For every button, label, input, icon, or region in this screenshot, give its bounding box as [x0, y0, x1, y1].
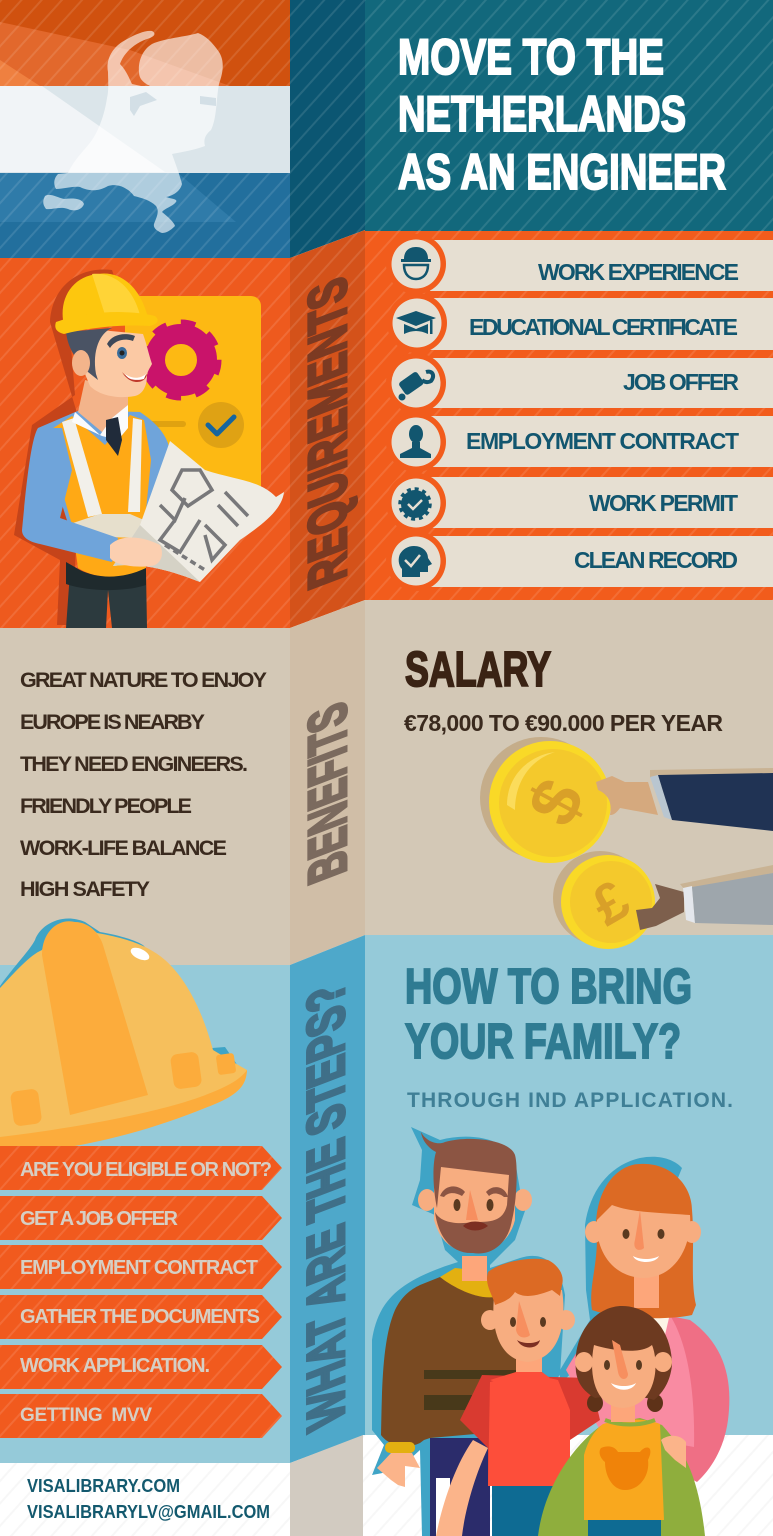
benefits list: FRIENDLY PEOPLE [20, 794, 192, 818]
benefits list: THEY NEED ENGINEERS. [20, 752, 248, 776]
step 4 [0, 1295, 282, 1339]
torso shirt [38, 410, 170, 530]
heading: how to bring your family: HOW TO BRING [405, 960, 692, 1014]
heading: how to bring your family [405, 960, 692, 1069]
illustration: yellow hard hat [0, 918, 247, 1156]
row: work experience [386, 234, 773, 294]
title [398, 29, 726, 200]
boy [436, 1259, 600, 1536]
cuff and hand [385, 1442, 415, 1453]
row: clean record [386, 531, 773, 591]
benefits list: HIGH SAFETY [20, 877, 150, 901]
small coin [553, 851, 655, 949]
step 6 [0, 1394, 282, 1438]
blue outline shadows [372, 1127, 682, 1536]
row: clean record: CLEAN RECORD [574, 547, 738, 573]
row: employment contract [386, 412, 773, 472]
illustration: engineer with blueprint [14, 269, 284, 628]
big coin: $ [512, 767, 600, 837]
panel: title background [290, 0, 773, 258]
illustration: family [372, 1127, 729, 1536]
step list [0, 1146, 282, 1438]
collar and tie [72, 405, 128, 440]
title: MOVE TO THE [398, 29, 664, 85]
row: employment contract: EMPLOYMENT CONTRACT [466, 428, 739, 454]
footer contact: VISALIBRARYLV@GMAIL.COM [27, 1502, 270, 1522]
panel: steps and family background [0, 935, 773, 1536]
heading: WHAT ARE THE STEPS?: WHAT ARE THE STEPS? [296, 975, 356, 1438]
step 5: WORK APPLICATION. [20, 1355, 210, 1377]
step 6: GETTING MVV [20, 1405, 152, 1426]
step 3 [0, 1245, 282, 1289]
row: job offer [386, 353, 773, 413]
step 4: GATHER THE DOCUMENTS [20, 1306, 260, 1328]
panel: benefits background [0, 600, 773, 965]
head [80, 330, 152, 397]
pants [66, 572, 147, 628]
heading: BENEFITS: BENEFITS [297, 695, 358, 892]
heading: REQUIREMENTS: REQUIREMENTS [297, 270, 358, 597]
heading: how to bring your family: YOUR FAMILY? [405, 1015, 681, 1069]
hard hat [63, 274, 148, 320]
row: work permit: WORK PERMIT [589, 490, 738, 516]
light hand and navy sleeve [650, 768, 773, 778]
yellow card with gear [125, 296, 261, 496]
salary amount: €78,000 TO €90.000 PER YEAR [404, 710, 723, 736]
footer contact: VISALIBRARY.COM [27, 1476, 180, 1496]
blueprint paper [113, 441, 284, 582]
step 5 [0, 1345, 282, 1389]
title: NETHERLANDS [398, 86, 686, 142]
family subtitle: THROUGH IND APPLICATION. [407, 1089, 733, 1112]
mother [566, 1164, 729, 1482]
benefits list [20, 668, 267, 901]
row: job offer: JOB OFFER [623, 369, 739, 395]
row: educational certificate: EDUCATIONAL CERTIFICATE [469, 314, 738, 340]
benefits list: GREAT NATURE TO ENJOY [20, 668, 267, 692]
neck [78, 380, 128, 432]
panel: flag background [0, 0, 290, 258]
mother's hand [661, 1436, 686, 1468]
benefits list: EUROPE IS NEARBY [20, 710, 205, 734]
row: work permit [386, 473, 773, 533]
vest [50, 415, 151, 577]
father [377, 1132, 532, 1536]
step 3: EMPLOYMENT CONTRACT [20, 1257, 258, 1279]
step 1: ARE YOU ELIGIBLE OR NOT? [20, 1159, 272, 1181]
footer contact [27, 1476, 270, 1522]
sleeve left [22, 428, 118, 562]
small coin: £ [581, 867, 639, 938]
step 2: GET A JOB OFFER [20, 1208, 179, 1230]
big coin [480, 737, 611, 863]
row: work experience: WORK EXPERIENCE [538, 259, 739, 285]
step 2 [0, 1196, 282, 1240]
girl [538, 1306, 705, 1536]
shadow silhouette [14, 269, 122, 625]
hand [110, 538, 162, 567]
dark hand and grey sleeve [680, 865, 773, 890]
panel: requirements background [0, 230, 773, 628]
step 1 [0, 1146, 282, 1190]
row: educational certificate [387, 293, 773, 353]
benefits list: WORK-LIFE BALANCE [20, 836, 227, 860]
icon: Netherlands map [43, 31, 223, 233]
heading: SALARY: SALARY [405, 643, 551, 697]
requirement list [386, 234, 773, 591]
illustration: coins and hands [480, 737, 773, 949]
